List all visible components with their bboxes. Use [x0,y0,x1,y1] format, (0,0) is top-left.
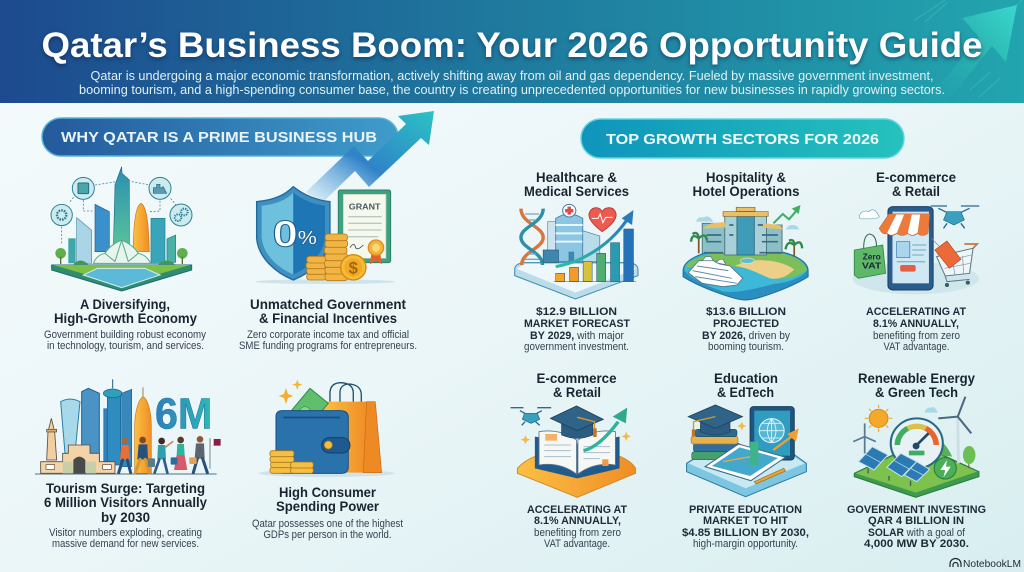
brand mark: NotebookLM: NotebookLM [963,558,1021,570]
description: Zero corporate income tax and official [247,329,409,341]
statistic: PRIVATE EDUCATION [689,504,802,516]
description [44,329,207,352]
heading: & Retail [892,184,940,199]
heading: by 2030 [101,510,150,525]
section heading: top growth sectors: TOP GROWTH SECTORS FOR 2026 [606,131,879,148]
statistic: government investment. [524,341,629,353]
heading: High Consumer [279,485,377,500]
statistic [682,504,809,550]
icon: header growth arrow [925,5,1017,103]
description [49,527,202,550]
heading [54,297,197,326]
description [239,329,417,352]
statistic: 8.1% ANNUALLY, [534,515,621,527]
description: Government building robust economy [44,329,207,341]
header banner [0,0,1024,103]
icon: online store: VAT [862,261,882,271]
icon: shield, grant and coins: 0 [273,213,298,255]
icon: hotel island [683,205,808,300]
intro text: Qatar is undergoing a major economic transformation, actively shifting away from oil and gas dependency. Fueled by massive government investment, [90,68,934,83]
panel: e-commerce sector (top) [853,170,979,353]
statistic: SOLAR with a goal of [868,527,966,539]
section heading: why Qatar [42,118,398,156]
heading [44,481,207,525]
panel: healthcare sector [515,170,638,353]
description: SME funding programs for entrepreneurs. [239,340,417,352]
statistic: benefiting from zero [534,527,621,539]
description: in technology, tourism, and services. [47,340,204,352]
icon: online store: Zero [863,251,881,261]
icon: shield, grant and coins [255,187,395,284]
heading: E-commerce [536,371,617,386]
statistic: BY 2026, driven by [702,330,791,342]
heading: Medical Services [524,184,629,199]
panel: renewable energy sector [847,371,986,550]
icon: wallet and shopping bag [258,379,395,477]
icon: shield, grant and coins: GRANT [349,201,380,211]
description: massive demand for new services. [52,538,199,550]
title: Qatar’s Business Boom: Your 2026 Opportunity Guide [42,25,982,65]
statistic: BY 2029, with major [530,330,624,342]
statistic: ACCELERATING AT [527,504,627,516]
heading [536,371,617,400]
statistic: benefiting from zero [873,330,960,342]
heading: E-commerce [876,170,956,185]
statistic: MARKET FORECAST [524,318,630,330]
intro text: booming tourism, and a high-spending consumer base, the country is creating unprecedented opportunities for new businesses in rapidly growing sectors. [79,82,945,97]
panel: consumer spending [252,379,403,541]
statistic: GOVERNMENT INVESTING [847,504,986,516]
icon: rising arrow [306,111,434,203]
statistic: $12.9 BILLION [536,306,617,318]
statistic: VAT advantage. [544,538,610,550]
panel: government incentives [239,187,417,352]
heading: & Financial Incentives [259,311,397,326]
statistic [702,306,791,353]
statistic: PROJECTED [713,318,779,330]
statistic [527,504,627,550]
heading: Unmatched Government [250,297,406,312]
icon: shield, grant and coins: $ [349,258,359,277]
heading [276,485,380,514]
icon: healthcare chart [515,204,638,299]
panel: tourism surge [35,379,221,550]
icon: books and tablet [687,405,806,497]
heading [524,170,629,199]
statistic [524,306,630,353]
panel: diversifying economy [44,167,207,352]
heading: 6 Million Visitors Annually [44,495,207,510]
heading: Healthcare & [536,170,617,185]
intro text [79,68,945,97]
heading: Tourism Surge: Targeting [46,481,205,496]
panel: hospitality sector [683,170,808,353]
statistic [847,504,986,550]
description [252,518,403,541]
statistic: booming tourism. [708,341,784,353]
heading: & EdTech [717,385,774,400]
heading [858,371,975,400]
icon: online store [853,206,979,294]
icon: tourism skyline with visitors: 6M [155,391,212,439]
statistic [866,306,966,353]
statistic: $13.6 BILLION [706,306,786,318]
section heading: top growth sectors [581,119,904,158]
section heading: why Qatar: WHY QATAR IS A PRIME BUSINESS HUB [61,129,377,146]
visitors [119,436,221,473]
description: GDPs per person in the world. [264,529,392,541]
heading: Hotel Operations [692,184,800,199]
heading [714,371,778,400]
statistic: VAT advantage. [884,341,950,353]
heading [250,297,406,326]
statistic: 4,000 MW BY 2030. [864,538,969,550]
description: Visitor numbers exploding, creating [49,527,202,539]
panel: e-commerce sector (bottom) [511,371,636,550]
statistic: $4.85 BILLION BY 2030, [682,527,809,539]
statistic: 8.1% ANNUALLY, [873,318,959,330]
heading [876,170,956,199]
heading: & Green Tech [875,385,958,400]
description: Qatar possesses one of the highest [252,518,403,530]
statistic: QAR 4 BILLION IN [868,515,964,527]
statistic: ACCELERATING AT [866,306,966,318]
icon: shield, grant and coins: % [298,226,317,249]
heading: Education [714,371,778,386]
icon: solar and wind [853,397,979,497]
heading [692,170,800,199]
heading: Renewable Energy [858,371,975,386]
heading: & Retail [553,385,601,400]
heading: Hospitality & [706,170,786,185]
icon: book with cap [511,406,636,497]
heading: A Diversifying, [80,297,170,312]
heading: Spending Power [276,499,380,514]
icon: tourism skyline with visitors [35,379,221,474]
statistic: MARKET TO HIT [703,515,788,527]
icon: city skyline [51,167,192,291]
statistic: high-margin opportunity. [693,538,798,550]
heading: High-Growth Economy [54,311,197,326]
panel: education sector [682,371,809,550]
